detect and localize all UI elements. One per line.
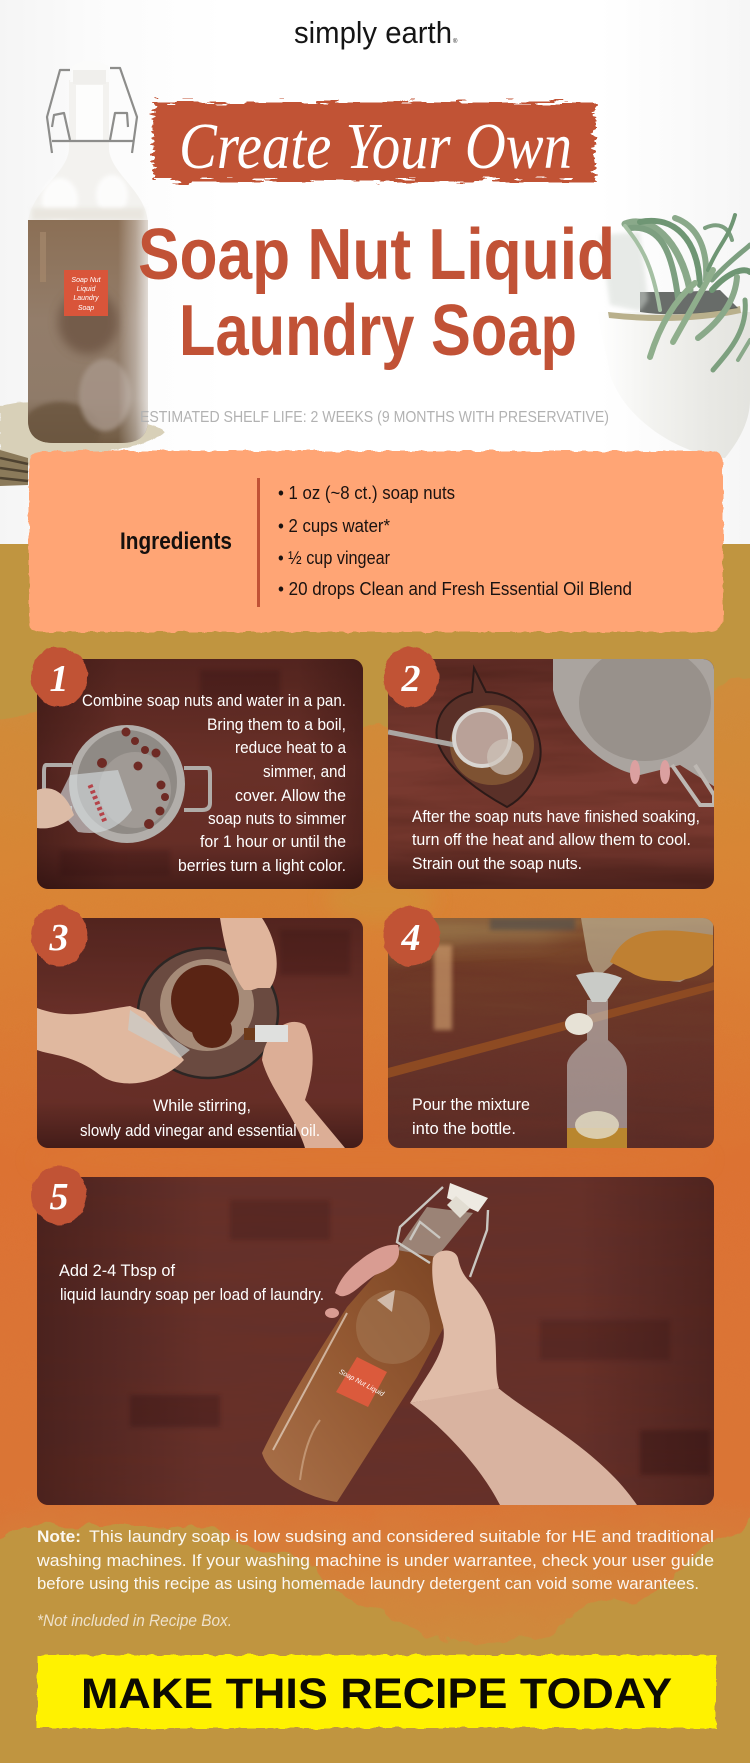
ingredient list bbox=[278, 483, 632, 599]
step 1 text: simmer, and bbox=[263, 762, 346, 781]
photo: straining soap nuts bbox=[388, 645, 720, 889]
step 5 text: liquid laundry soap per load of laundry. bbox=[60, 1285, 324, 1304]
step 1 text: soap nuts to simmer bbox=[208, 809, 346, 828]
bottle label: Liquid bbox=[77, 286, 96, 293]
step 4 badge bbox=[383, 906, 439, 966]
photo: air plant in white pot bbox=[597, 215, 750, 458]
ingredients heading: Ingredients bbox=[120, 528, 232, 555]
title: Soap Nut Liquid Laundry Soap bbox=[138, 215, 615, 371]
step 1 text: Bring them to a boil, bbox=[207, 715, 346, 734]
step 1 text: reduce heat to a bbox=[235, 738, 346, 757]
note text: This laundry soap is low sudsing and considered suitable for HE and traditional bbox=[89, 1527, 714, 1546]
note text bbox=[36, 1527, 714, 1593]
note text: washing machines. If your washing machine is under warrantee, check your user guide bbox=[36, 1551, 714, 1570]
panel: step 5 bbox=[31, 1166, 714, 1505]
bottle body bbox=[262, 1250, 445, 1502]
panel: step 3 bbox=[31, 906, 363, 1148]
step 2 text: After the soap nuts have finished soaking, bbox=[412, 807, 700, 826]
step 4 text: into the bottle. bbox=[412, 1119, 516, 1138]
ingredient list: • 20 drops Clean and Fresh Essential Oil Blend bbox=[278, 579, 632, 599]
header background bbox=[0, 0, 750, 545]
bottle label bbox=[64, 270, 108, 316]
step 4 text bbox=[412, 1095, 530, 1138]
photo: pouring into bottle bbox=[388, 918, 714, 1148]
bottle label: Laundry bbox=[73, 295, 99, 302]
step 4 badge: 4 bbox=[400, 917, 420, 959]
photo: woven mat under bottle bbox=[0, 401, 165, 486]
photo: pot and pouring cup bbox=[37, 659, 363, 889]
brush stroke banner bbox=[153, 102, 595, 183]
bottle label bbox=[336, 1357, 387, 1407]
photo: glass swing-top bottle bbox=[28, 66, 148, 443]
step 4 text: Pour the mixture bbox=[412, 1095, 530, 1114]
step 1 text: for 1 hour or until the bbox=[200, 832, 346, 851]
step 5 text: Add 2-4 Tbsp of bbox=[59, 1261, 175, 1280]
step 1 badge bbox=[31, 647, 87, 707]
photo: hand holding finished bottle bbox=[37, 1177, 714, 1505]
step 3 text: While stirring, bbox=[153, 1096, 251, 1115]
step 3 badge bbox=[31, 906, 87, 966]
title: Soap Nut Liquid Laundry Soap: Laundry Soap bbox=[179, 291, 577, 371]
step 1 badge: 1 bbox=[50, 658, 68, 700]
step 2 badge: 2 bbox=[400, 658, 420, 700]
photo: hands adding vinegar and oil to bowl bbox=[37, 918, 363, 1148]
mustard background with orange wash bbox=[0, 544, 750, 1763]
step 5 badge bbox=[31, 1166, 87, 1224]
logo: simply earth: ® bbox=[453, 38, 458, 45]
bottle label: Soap Nut Liquid bbox=[338, 1369, 386, 1399]
step 3 badge: 3 bbox=[48, 917, 68, 959]
bottle label: Soap Nut bbox=[71, 277, 102, 284]
step 1 text: cover. Allow the bbox=[235, 786, 346, 805]
note text: before using this recipe as using homemade laundry detergent can void some warantees. bbox=[37, 1574, 699, 1593]
cap bbox=[447, 1183, 488, 1212]
bottle label: Soap bbox=[78, 305, 94, 312]
ingredient list: • 2 cups water* bbox=[278, 516, 390, 536]
shelf life line: ESTIMATED SHELF LIFE: 2 WEEKS (9 MONTHS WITH PRESERVATIVE) bbox=[140, 409, 609, 426]
step 2 text bbox=[412, 807, 700, 873]
call to action button: MAKE THIS RECIPE TODAY bbox=[81, 1670, 672, 1718]
step 1 text: berries turn a light color. bbox=[178, 856, 346, 875]
step 5 text bbox=[59, 1261, 324, 1304]
step 5 badge: 5 bbox=[50, 1176, 68, 1218]
hand bbox=[410, 1250, 499, 1403]
divider bbox=[257, 478, 260, 607]
step 3 text bbox=[80, 1096, 320, 1140]
step 1 text: Combine soap nuts and water in a pan. bbox=[82, 691, 346, 710]
panel: step 4 bbox=[383, 906, 714, 1148]
ingredient list: • 1 oz (~8 ct.) soap nuts bbox=[278, 483, 455, 503]
logo: simply earth: simply earth bbox=[294, 15, 452, 50]
banner script: Create Your Own: Create Your Own bbox=[179, 110, 572, 183]
panel: step 2 bbox=[383, 645, 720, 889]
note text: Note: bbox=[37, 1527, 81, 1546]
title: Soap Nut Liquid Laundry Soap: Soap Nut Liquid bbox=[138, 215, 615, 295]
step 3 text: slowly add vinegar and essential oil. bbox=[80, 1121, 320, 1140]
swing clasp wire bbox=[47, 68, 137, 153]
panel: ingredients bbox=[29, 451, 723, 632]
call to action button bbox=[37, 1655, 716, 1728]
arm bbox=[410, 1387, 637, 1505]
panel: step 1 bbox=[31, 647, 363, 889]
ingredient list: • ½ cup vingear bbox=[278, 548, 390, 568]
step 2 text: turn off the heat and allow them to cool. bbox=[412, 830, 691, 849]
footnote: *Not included in Recipe Box. bbox=[37, 1612, 232, 1630]
step 2 badge bbox=[383, 647, 439, 707]
step 1 text bbox=[82, 691, 346, 875]
step 2 text: Strain out the soap nuts. bbox=[412, 854, 582, 873]
